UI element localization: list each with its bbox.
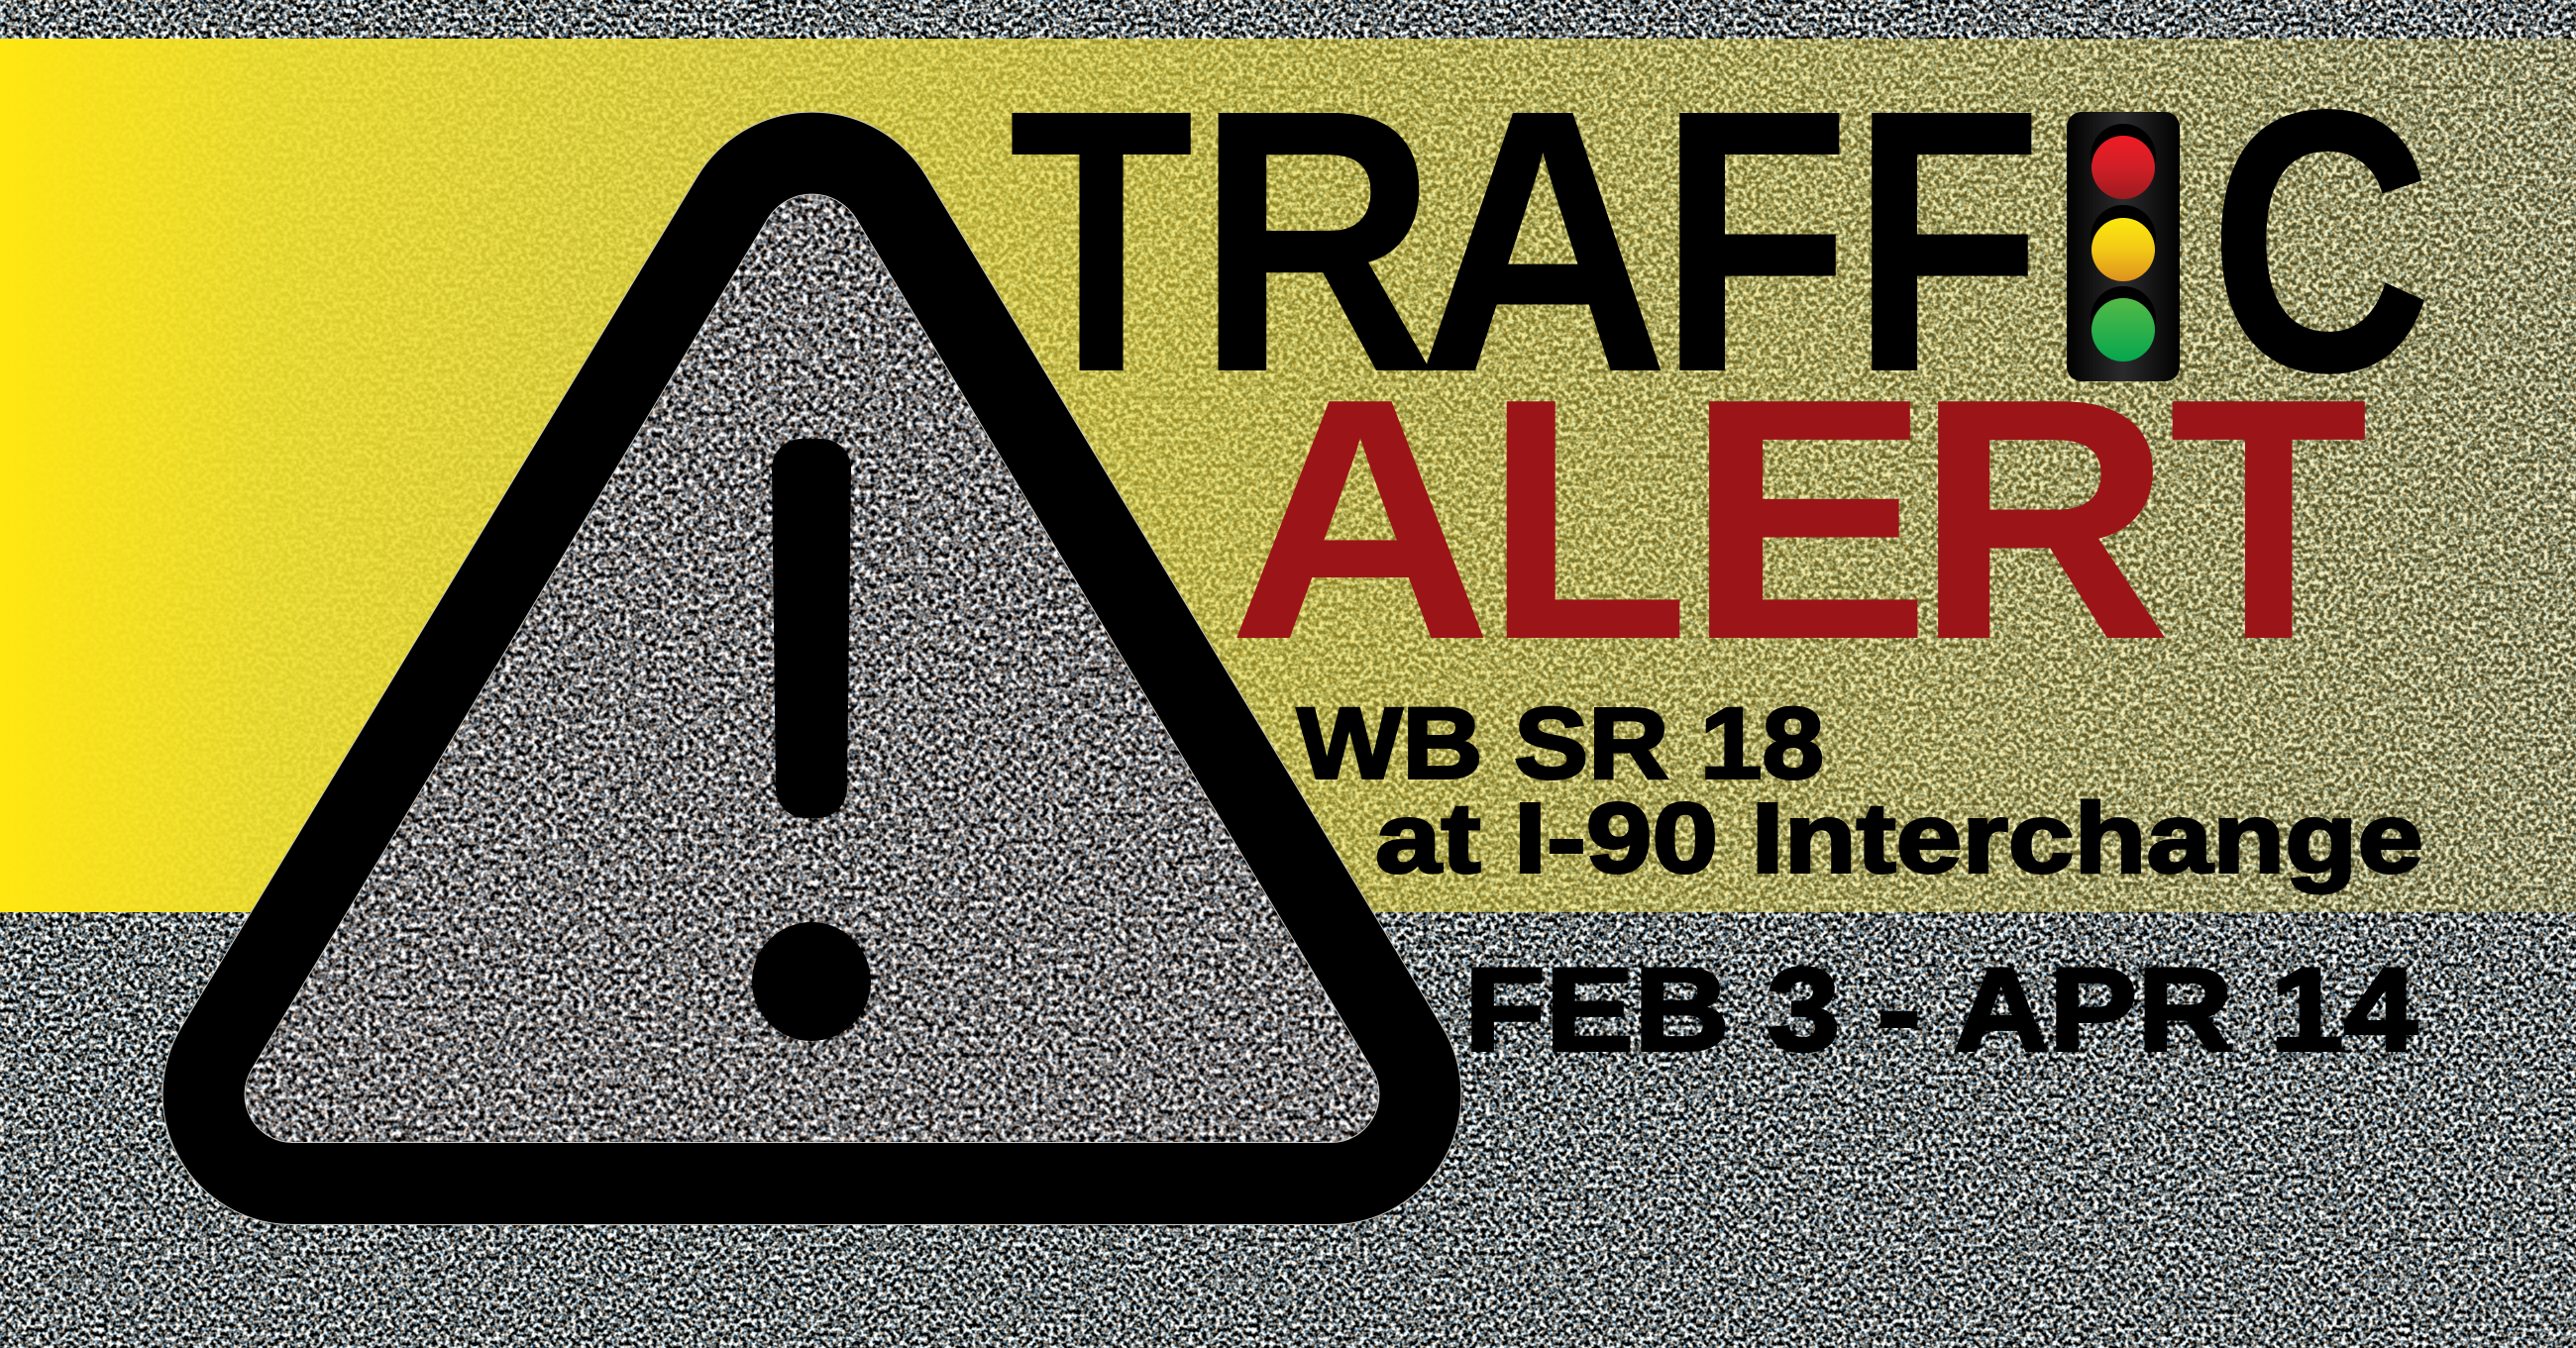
icon: traffic light xyxy=(2067,112,2180,381)
heading: ALERT: L xyxy=(1484,327,1690,711)
heading: ALERT: E xyxy=(1684,327,1932,711)
triangle interior xyxy=(246,194,1379,1142)
title: TRAFFIC: C xyxy=(2208,32,2433,451)
title: TRAFFIC: R xyxy=(1196,32,1438,450)
title: TRAFFIC: F xyxy=(1851,32,2043,450)
heading: ALERT xyxy=(1228,327,2368,711)
title: TRAFFIC xyxy=(1009,32,2433,451)
heading: ALERT: R xyxy=(1914,328,2173,711)
text: dates: FEB 3 - APR 14 xyxy=(1464,943,2417,1076)
text: road name: WB SR 18 xyxy=(1297,687,1824,800)
triangle outline xyxy=(204,154,1420,1184)
text: location: at I-90 Interchange xyxy=(1375,782,2423,893)
title: TRAFFIC: I xyxy=(2079,32,2167,451)
title: TRAFFIC: F xyxy=(1659,32,1851,450)
heading: ALERT: T xyxy=(2169,327,2368,711)
exclamation bar xyxy=(772,439,851,818)
yellow lamp xyxy=(2091,205,2156,281)
exclamation dot xyxy=(752,922,871,1041)
heading: ALERT: A xyxy=(1228,328,1493,711)
title: TRAFFIC: T xyxy=(1009,32,1194,450)
green lamp xyxy=(2091,286,2156,362)
red lamp xyxy=(2091,124,2156,199)
title: TRAFFIC: A xyxy=(1416,32,1670,450)
warning triangle icon xyxy=(129,59,1496,1198)
yellow road band xyxy=(0,39,2576,912)
